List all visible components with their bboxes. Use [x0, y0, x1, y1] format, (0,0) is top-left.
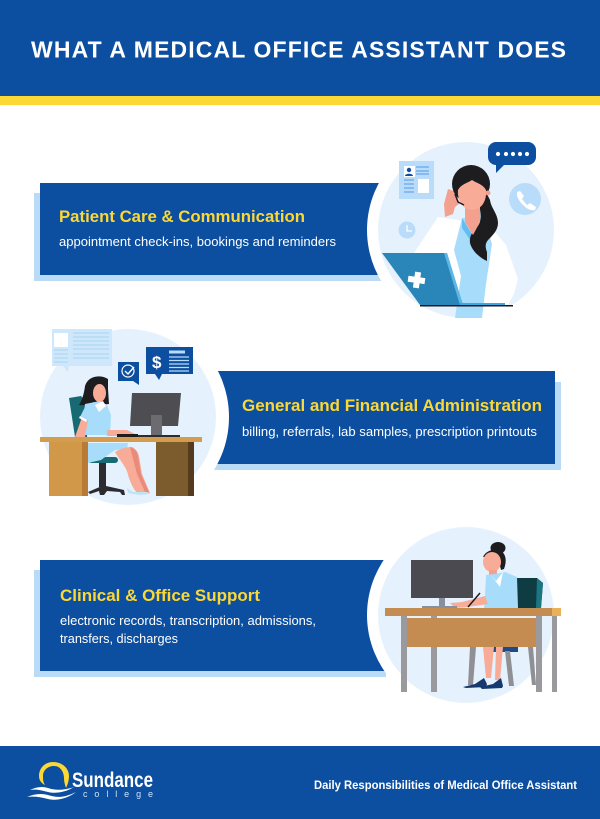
logo: Sundance College: college	[83, 789, 153, 799]
computer monitor	[411, 560, 473, 608]
footer band	[0, 746, 600, 819]
heading: clinical support: Clinical & Office Support	[60, 586, 260, 605]
illustration: administrator at desk	[40, 329, 216, 505]
panel: general and financial administration banner	[27, 316, 561, 518]
heading: administration: General and Financial Administration	[242, 396, 542, 415]
icon: speech bubble	[488, 142, 536, 173]
icon: document bubble	[52, 329, 112, 372]
text: clinical support duties: electronic records, transcription, admissions,	[60, 613, 316, 628]
chair	[468, 578, 543, 686]
panel: clinical and office support banner	[34, 516, 565, 714]
text: administration duties: billing, referrals, lab samples, prescription printouts	[242, 424, 537, 439]
logo: Sundance College: Sundance	[72, 769, 153, 792]
illustration: clinician at desk	[378, 527, 561, 703]
icon: patient record document	[399, 161, 434, 199]
illustration: receptionist on phone with laptop	[378, 142, 554, 318]
wooden desk	[40, 437, 202, 496]
heading: patient care: Patient Care & Communication	[59, 207, 305, 226]
header band	[0, 0, 600, 105]
panel: patient care banner	[34, 131, 565, 329]
text: clinical support duties: transfers, discharges	[60, 631, 178, 646]
woman	[414, 165, 518, 318]
icon: clock	[398, 222, 416, 238]
icon: billing bubble	[146, 347, 193, 380]
computer monitor	[117, 393, 181, 437]
laptop	[382, 253, 513, 306]
icon: telephone	[509, 183, 541, 215]
office chair	[69, 396, 125, 495]
title: WHAT A MEDICAL OFFICE ASSISTANT DOES	[31, 36, 566, 62]
seated woman	[75, 376, 150, 495]
footer caption: Daily Responsibilities of Medical Office Assistant	[314, 780, 577, 792]
seated woman	[450, 542, 518, 689]
text: patient care duties: appointment check-ins, bookings and reminders	[59, 234, 336, 249]
logo: Sundance College	[27, 762, 153, 800]
icon: billing bubble: $	[152, 353, 162, 372]
icon: check bubble	[118, 362, 139, 385]
office desk	[385, 608, 561, 692]
